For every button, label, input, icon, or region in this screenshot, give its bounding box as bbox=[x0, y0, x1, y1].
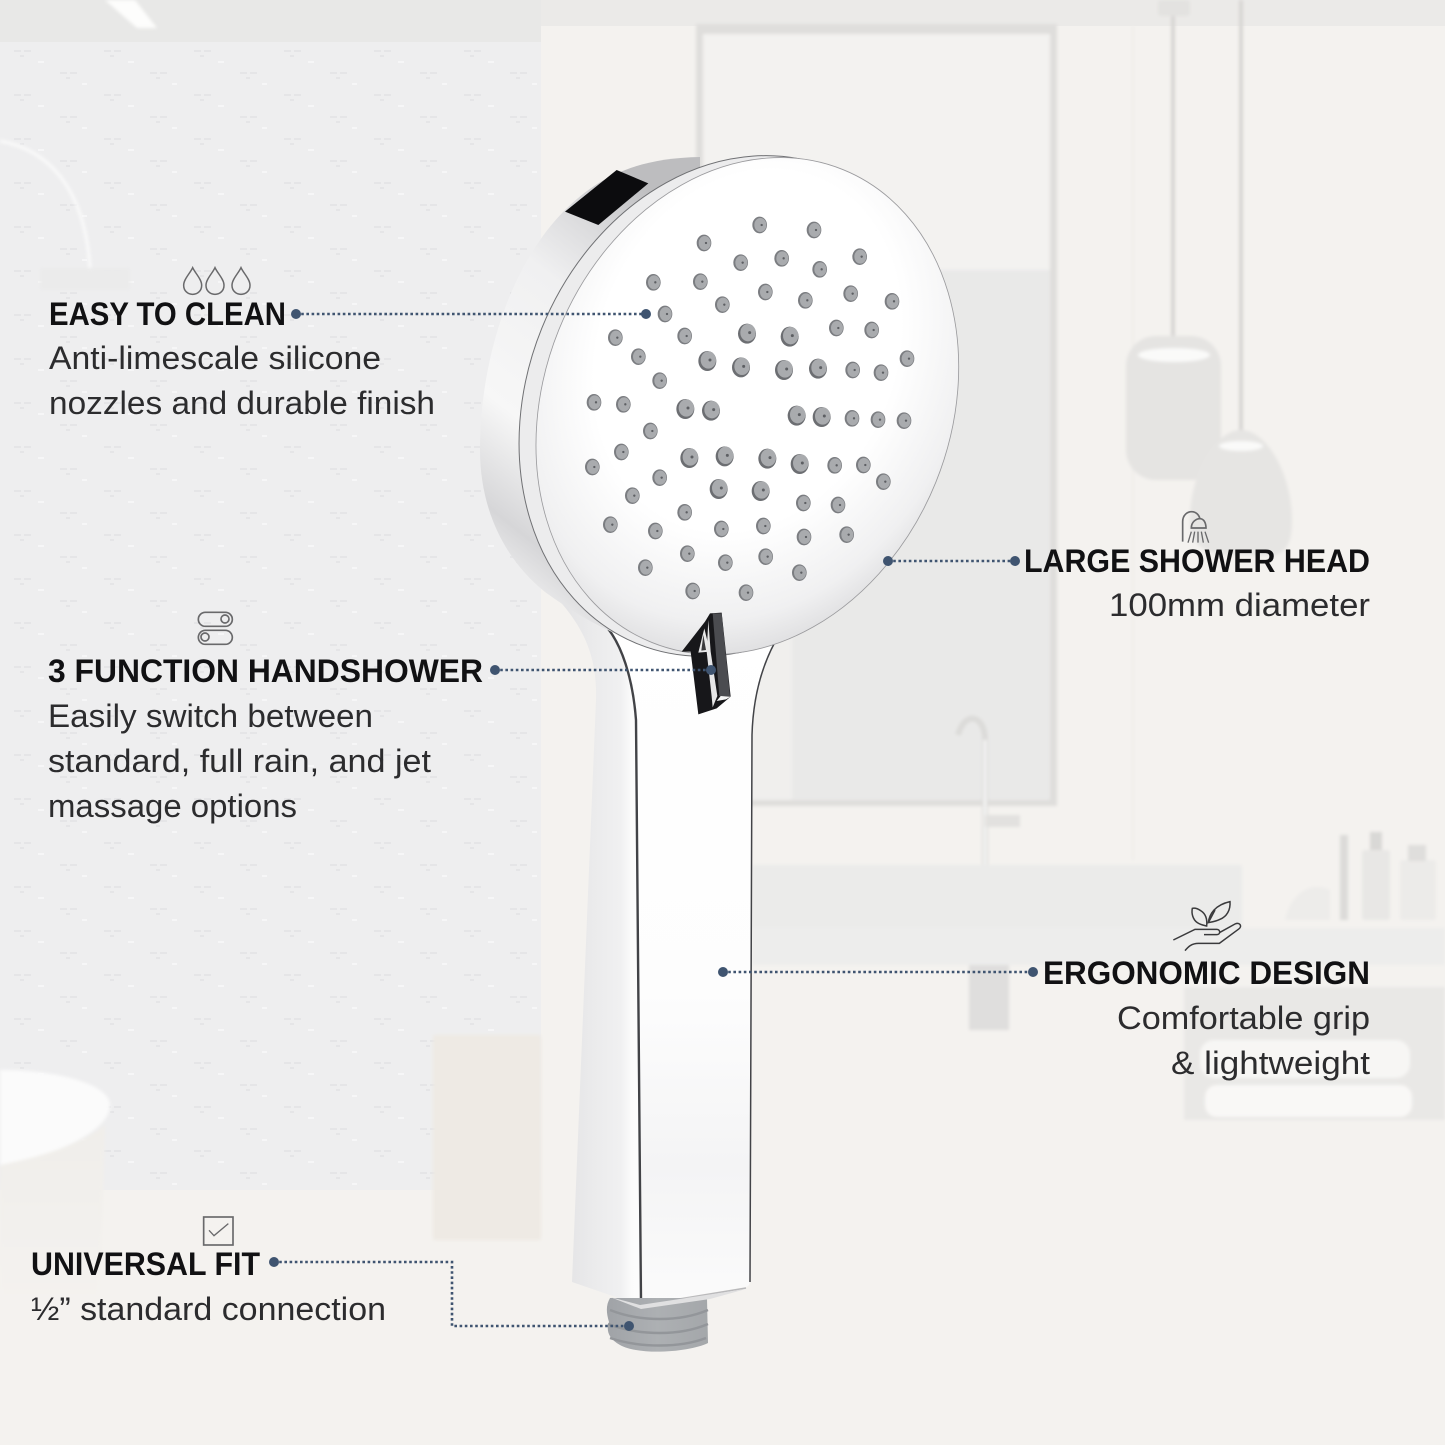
rim reflection bbox=[565, 170, 648, 225]
text: 3 function handshower: Easily switch between bbox=[48, 698, 373, 734]
nozzles bbox=[585, 217, 914, 601]
text: universal fit bbox=[31, 1246, 386, 1327]
handle: edge lines bbox=[603, 623, 775, 1305]
text: large shower head bbox=[1024, 543, 1370, 623]
icon: shower head bbox=[1183, 512, 1209, 543]
text: easy to clean: EASY TO CLEAN bbox=[49, 296, 286, 332]
handle: front face bbox=[600, 615, 775, 1304]
callout line: universal fit bbox=[269, 1257, 634, 1331]
icon: hand with plant bbox=[1173, 902, 1241, 951]
head rim bbox=[480, 157, 700, 656]
text: large shower head: LARGE SHOWER HEAD bbox=[1024, 543, 1370, 579]
text: universal fit: ½” standard connection bbox=[31, 1291, 386, 1327]
text: easy to clean: Anti-limescale silicone bbox=[49, 340, 381, 376]
icon: checkbox bbox=[204, 1217, 233, 1245]
icon: toggle switches bbox=[198, 612, 232, 644]
text: 3 function handshower: 3 FUNCTION HANDSHOWER bbox=[48, 653, 483, 689]
callout line: 3 function bbox=[490, 665, 716, 675]
callout line: easy to clean bbox=[291, 309, 651, 319]
icon: water drops bbox=[184, 268, 250, 294]
callout line: large shower head bbox=[883, 556, 1020, 566]
function lever bbox=[682, 613, 731, 714]
head face bbox=[463, 93, 1031, 719]
text: ergonomic design: & lightweight bbox=[1171, 1045, 1370, 1081]
handle: side face bbox=[535, 575, 642, 1306]
text: 3 function handshower bbox=[48, 653, 483, 824]
text: large shower head: 100mm diameter bbox=[1109, 587, 1370, 623]
text: easy to clean: nozzles and durable finish bbox=[49, 385, 435, 421]
text: 3 function handshower: massage options bbox=[48, 788, 297, 824]
text: ergonomic design bbox=[1043, 955, 1370, 1081]
text: ergonomic design: ERGONOMIC DESIGN bbox=[1043, 955, 1370, 991]
text: easy to clean bbox=[49, 296, 435, 421]
callout line: ergonomic design bbox=[718, 967, 1038, 977]
text: universal fit: UNIVERSAL FIT bbox=[31, 1246, 260, 1282]
text: 3 function handshower: standard, full rain, and jet bbox=[48, 743, 431, 779]
shower head bbox=[446, 90, 1031, 722]
text: ergonomic design: Comfortable grip bbox=[1117, 1000, 1370, 1036]
inner ring bbox=[446, 90, 1022, 722]
thread connector bbox=[607, 1289, 746, 1352]
